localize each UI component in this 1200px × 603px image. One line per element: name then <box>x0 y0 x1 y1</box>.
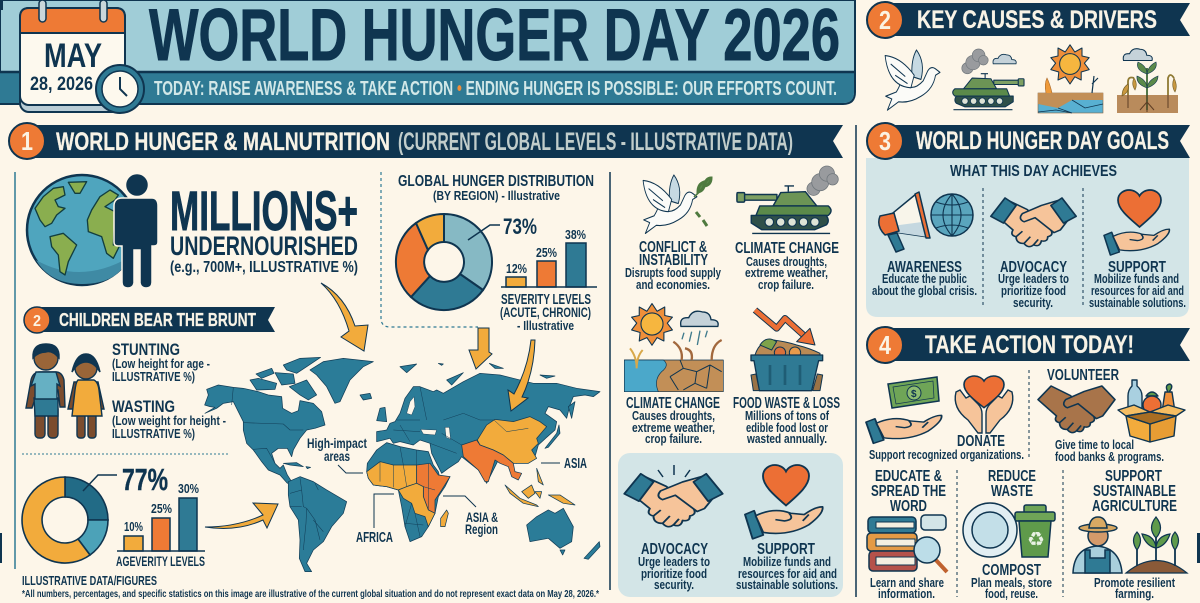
panel: advocacy and support: sustainable solutions. <box>736 578 838 592</box>
panel: take action today: VOLUNTEER <box>1047 367 1119 384</box>
panel: take action today: REDUCE <box>988 468 1036 485</box>
panel: take action today: DONATE <box>957 433 1005 450</box>
panel: advocacy and support: resources for aid and <box>738 567 837 581</box>
panel: world hunger day goals: about the global crisis. <box>872 284 977 298</box>
panel: take action today: WORD <box>890 498 927 515</box>
header panel <box>0 0 855 104</box>
text: stunting and wasting: ILLUSTRATIVE %) <box>112 426 195 441</box>
panel: take action today: WASTE <box>991 483 1033 500</box>
footnote: *All numbers, percentages, and specific statistics on this image are illustrative of the current global situation and do not represent exact data on May 28, 2026.* <box>22 588 600 600</box>
stat: millions undernourished: (e.g., 700M+, ILLUSTRATIVE %) <box>170 259 358 276</box>
card: conflict and instability: INSTABILITY <box>639 252 708 269</box>
donut chart: region share <box>396 214 492 310</box>
map labels: areas <box>324 448 350 464</box>
map: world hunger <box>205 357 600 572</box>
text: stunting and wasting: (Low height for age - <box>112 356 210 371</box>
card: climate change drought: Causes droughts, <box>632 409 715 423</box>
card: food waste and loss: edible food lost or <box>746 421 828 435</box>
icon: person <box>114 174 158 288</box>
panel: take action today: Plan meals, store <box>971 576 1052 590</box>
panel: key causes and drivers <box>867 2 1190 113</box>
footnote <box>22 573 600 600</box>
donut chart: 77 percent <box>22 477 108 563</box>
icon: donation box <box>1118 380 1185 442</box>
panel: take action today: food banks & programs. <box>1055 450 1164 464</box>
text: stunting and wasting: ILLUSTRATIVE %) <box>112 369 195 384</box>
panel: world hunger day goals: WHAT THIS DAY ACHIEVES <box>950 163 1117 180</box>
bar chart: severity levels: 38% <box>565 227 586 242</box>
banner: take action: TAKE ACTION TODAY! <box>925 331 1134 359</box>
panel: children bear the brunt banner: 2 <box>33 313 41 330</box>
bar chart: severity levels: 25% <box>536 245 557 260</box>
panel: advocacy and support: security. <box>654 578 694 592</box>
panel: world hunger day goals: Educate the public <box>882 272 967 286</box>
chart: global hunger distribution: GLOBAL HUNGER DISTRIBUTION <box>398 173 594 190</box>
icon: heart in hands <box>955 376 1013 433</box>
icon: wilted plants <box>1117 49 1178 113</box>
banner: take action <box>867 327 1190 363</box>
icon: banknote and hand <box>866 377 942 443</box>
chart: global hunger distribution: (ACUTE, CHRONIC) <box>500 304 591 320</box>
stat: millions undernourished: MILLIONS+ <box>170 179 358 242</box>
card: climate change drought: crop failure. <box>645 432 702 446</box>
chart: children donut and age severity bars: 77% <box>122 462 168 497</box>
icon: globe <box>27 175 137 285</box>
card: food waste and loss: Millions of tons of <box>745 409 830 423</box>
icon: handshake <box>991 198 1076 247</box>
panel: take action today: EDUCATE & <box>875 468 942 485</box>
stat: millions undernourished <box>170 179 358 276</box>
banner: key causes: 2 <box>879 5 891 35</box>
text: stunting and wasting: WASTING <box>112 397 175 416</box>
map labels <box>307 435 587 546</box>
panel: take action today: Promote resilient <box>1094 576 1176 590</box>
card: climate change drought: CLIMATE CHANGE <box>626 395 720 412</box>
panel: take action today: COMPOST <box>982 562 1041 579</box>
icon: plate and recycling bin: ♻ <box>1027 527 1045 551</box>
bar chart: age severity: AGEVERITY LEVELS <box>116 553 205 569</box>
icon: dove <box>885 50 940 110</box>
panel: take action today: Learn and share <box>870 576 944 590</box>
chart: children donut and age severity bars <box>22 462 205 569</box>
chart: global hunger distribution <box>396 173 597 333</box>
card: food waste and loss <box>733 310 840 446</box>
icon: handshake <box>624 465 723 527</box>
panel: world hunger and malnutrition banner: (CURRENT GLOBAL LEVELS - ILLUSTRATIVE DATA) <box>398 128 793 156</box>
icon: children <box>26 344 104 438</box>
icon: sun and drought <box>1038 45 1103 113</box>
panel: world hunger day goals: security. <box>1013 296 1053 310</box>
panel: take action today: SUPPORT <box>1105 468 1162 485</box>
map labels: AFRICA <box>356 530 393 546</box>
panel: children bear the brunt banner: CHILDREN BEAR THE BRUNT <box>59 310 256 330</box>
panel: world hunger and malnutrition banner: WORLD HUNGER & MALNUTRITION <box>56 128 390 156</box>
panel: world hunger day goals: ADVOCACY <box>1000 259 1067 276</box>
card: conflict and instability: Disrupts food supply <box>625 266 721 280</box>
icon: heart and hand <box>1104 190 1169 255</box>
panel: advocacy and support <box>618 453 843 597</box>
banner: goals <box>867 123 1190 159</box>
banner: goals: 3 <box>879 126 891 156</box>
card: food waste and loss: FOOD WASTE & LOSS <box>733 395 840 412</box>
card: conflict and instability: and economies. <box>636 278 710 292</box>
panel: world hunger day goals: Urge leaders to <box>998 272 1069 286</box>
icon: tank <box>953 49 1024 110</box>
subtitle strip: TODAY: RAISE AWARENESS & TAKE ACTION • ENDING HUNGER IS POSSIBLE: OUR EFFORTS COUNT. <box>154 78 837 100</box>
panel: take action today: food, reuse. <box>985 587 1038 601</box>
panel: world hunger day goals: SUPPORT <box>1108 259 1166 276</box>
banner: key causes <box>867 2 1190 38</box>
icon: seedlings <box>1126 517 1187 573</box>
panel: world hunger and malnutrition banner: 1 <box>21 126 33 156</box>
icon: heart in hand <box>745 465 823 539</box>
icon: books and magnifier <box>867 515 947 572</box>
arrow: severity to map <box>508 340 535 411</box>
card: food waste and loss: wasted annually. <box>746 432 827 446</box>
card: climate change drought: extreme weather, <box>632 421 715 435</box>
stat: millions undernourished: UNDERNOURISHED <box>170 231 358 261</box>
bar chart: age severity: 30% <box>178 482 199 496</box>
panel: take action today <box>866 327 1190 601</box>
icon: calendar and clock: MAY <box>44 37 102 75</box>
panel: world hunger day goals <box>866 123 1190 317</box>
map labels: ASIA <box>564 456 587 472</box>
map: americas <box>205 357 373 572</box>
bar chart: age severity <box>116 482 205 569</box>
bar chart: age severity: 25% <box>151 502 172 516</box>
bar chart: age severity: 10% <box>124 520 143 534</box>
panel: world hunger day goals: AWARENESS <box>887 259 962 276</box>
icon: brown handshake <box>1038 386 1115 433</box>
panel: take action today: farming. <box>1115 587 1154 601</box>
panel: take action today: information. <box>878 587 935 601</box>
card: climate change tank: extreme weather, <box>745 266 828 280</box>
panel: advocacy and support: SUPPORT <box>757 541 815 558</box>
icon: banknote and hand: $ <box>911 389 917 400</box>
card: climate change tank: Causes droughts, <box>746 255 827 269</box>
panel: advocacy and support: prioritize food <box>641 567 707 581</box>
bar chart: severity levels: 12% <box>506 261 527 276</box>
chart: global hunger distribution: 73% <box>503 214 537 239</box>
panel: advocacy and support: Mobilize funds and <box>743 555 831 569</box>
chart: global hunger distribution: (BY REGION) - Illustrative <box>433 188 560 203</box>
icon: calendar and clock: 28, 2026 <box>30 74 93 95</box>
banner: take action: 4 <box>879 330 891 360</box>
panel: advocacy and support: ADVOCACY <box>641 541 708 558</box>
map: africa, eurasia and oceania <box>367 363 600 559</box>
arrow: distribution to map <box>469 328 492 369</box>
panel: take action today: Support recognized organizations. <box>869 448 1024 462</box>
icon: megaphone and globe <box>879 192 973 252</box>
panel: world hunger day goals: prioritize food <box>1001 284 1066 298</box>
map labels: ASIA & <box>466 509 498 525</box>
panel: take action today: Give time to local <box>1055 438 1134 452</box>
bar chart: severity levels <box>501 227 597 287</box>
card: climate change drought <box>624 304 723 446</box>
card: climate change tank: crop failure. <box>758 278 814 292</box>
chart: global hunger distribution: SEVERITY LEVELS <box>501 292 591 308</box>
card: conflict and instability <box>625 175 721 292</box>
card: climate change tank <box>735 166 839 292</box>
text: stunting and wasting: STUNTING <box>112 340 180 359</box>
panel: children bear the brunt banner <box>24 307 275 333</box>
map labels: Region <box>465 521 498 537</box>
icon: farmer <box>1073 517 1122 573</box>
panel: take action today: SUSTAINABLE <box>1093 483 1176 500</box>
panel: take action today: SPREAD THE <box>871 483 946 500</box>
footnote: ILLUSTRATIVE DATA/FIGURES <box>22 573 157 588</box>
card: conflict and instability: CONFLICT & <box>639 239 707 256</box>
panel: cause cards <box>618 166 843 597</box>
icon: plate and recycling bin <box>963 503 1055 557</box>
card: climate change tank: CLIMATE CHANGE <box>735 240 839 257</box>
text: stunting and wasting: (Low weight for height - <box>112 413 226 428</box>
map labels: High-impact <box>307 435 367 451</box>
panel: advocacy and support: Urge leaders to <box>638 555 710 569</box>
arrow: children to map <box>205 503 278 528</box>
chart: global hunger distribution: - Illustrative <box>517 318 574 333</box>
text: stunting and wasting <box>112 340 226 441</box>
arrow: globe stat to map <box>321 283 368 351</box>
icon: calendar and clock <box>20 0 144 113</box>
panel: world hunger and malnutrition banner <box>9 123 843 159</box>
